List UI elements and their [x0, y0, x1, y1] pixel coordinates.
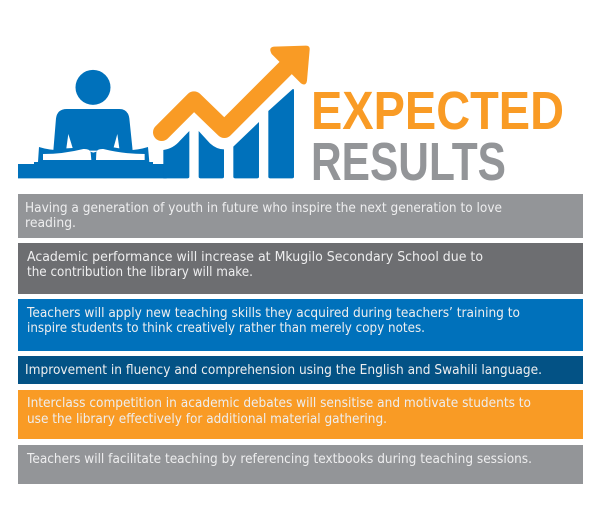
- heading: results: RESULTS: [311, 132, 506, 192]
- panel: youth generation: [18, 194, 583, 238]
- panel: teacher skills: inspire students to think creatively rather than merely copy notes.: [27, 321, 425, 336]
- panel: teacher skills: [18, 299, 583, 351]
- panel: interclass competition: use the library effectively for additional material gathering.: [27, 412, 387, 427]
- panel: fluency and comprehension: Improvement in fluency and comprehension using the English and Swahili language.: [25, 363, 542, 378]
- title: [311, 81, 564, 192]
- heading: expected: EXPECTED: [311, 81, 564, 141]
- arrow: rising trend: [162, 46, 310, 132]
- panel: youth generation: reading.: [25, 216, 76, 231]
- panel: textbook referencing: [18, 445, 583, 484]
- panel: interclass competition: Interclass competition in academic debates will sensitise and motivate students to: [27, 396, 531, 411]
- panel: textbook referencing: Teachers will facilitate teaching by referencing textbooks during teaching sessions.: [26, 452, 532, 467]
- panel: interclass competition: [18, 390, 583, 439]
- panel: fluency and comprehension: [18, 356, 583, 384]
- bar chart: [163, 89, 294, 178]
- panel: teacher skills: Teachers will apply new teaching skills they acquired during teachers’ training to: [26, 306, 520, 321]
- panel: academic performance: [18, 243, 583, 294]
- panel: youth generation: Having a generation of youth in future who inspire the next generation to love: [25, 201, 502, 216]
- icon: reader and rising chart: [18, 46, 310, 178]
- panel: academic performance: the contribution the library will make.: [27, 265, 253, 280]
- icon: person reading: [18, 70, 167, 178]
- panel: academic performance: Academic performance will increase at Mkugilo Secondary School due to: [27, 250, 483, 265]
